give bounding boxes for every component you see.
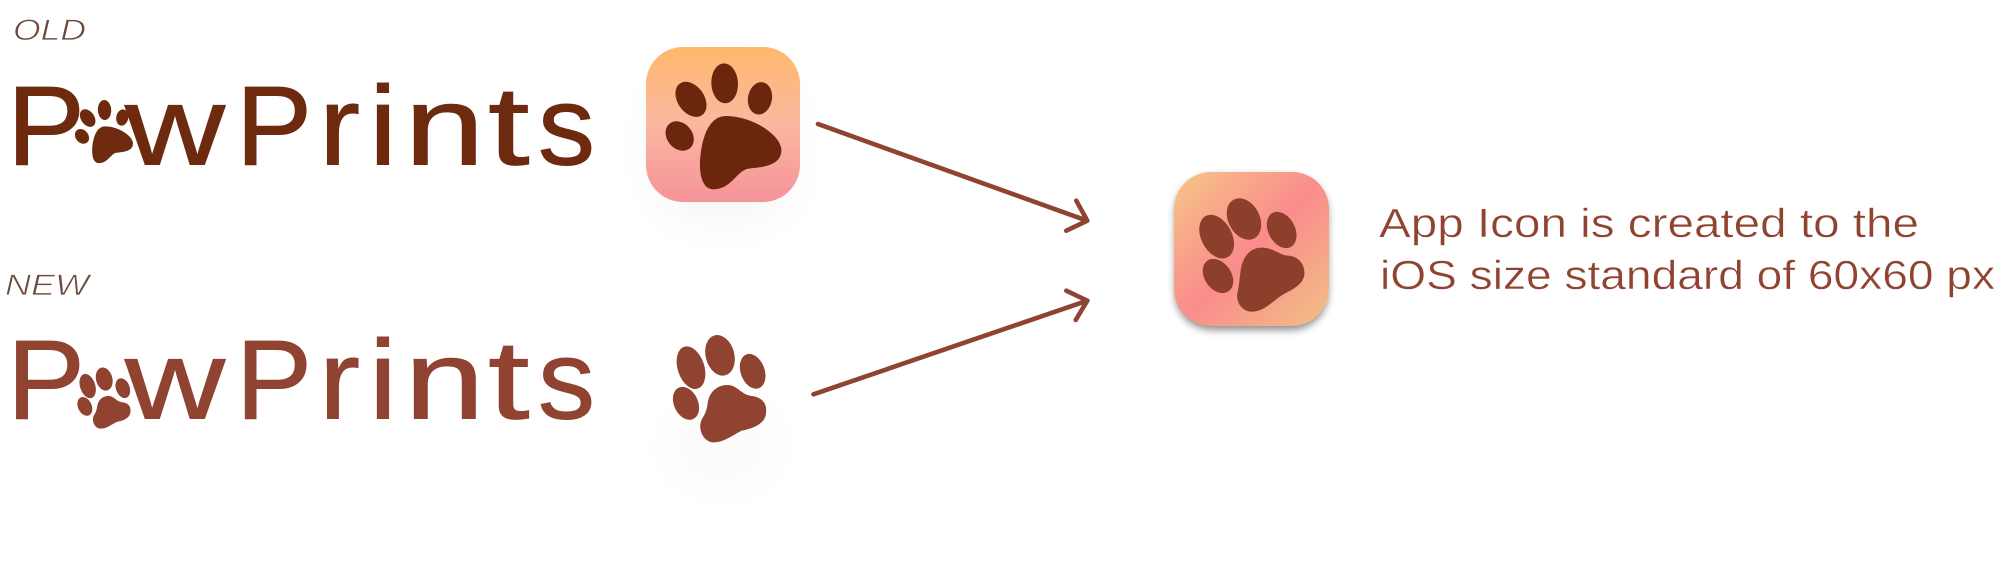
new PawPrints logo: w xyxy=(124,318,226,442)
old PawPrints logo xyxy=(7,64,595,188)
old PawPrints logo: t xyxy=(488,64,530,188)
arrow: old to app icon xyxy=(818,124,1087,231)
label: old: OLD xyxy=(13,14,86,47)
new PawPrints logo: n xyxy=(404,318,484,442)
new PawPrints logo xyxy=(7,318,595,442)
new PawPrints logo: s xyxy=(538,318,595,442)
new PawPrints logo: P xyxy=(236,318,312,442)
old PawPrints logo: w xyxy=(124,64,226,188)
icon: app paw xyxy=(1192,192,1304,312)
caption xyxy=(1379,200,1996,298)
old PawPrints logo: P xyxy=(7,64,85,188)
caption: App Icon is created to the xyxy=(1379,200,1919,246)
icon: old paw xyxy=(660,63,781,189)
old PawPrints logo: s xyxy=(538,64,595,188)
final app icon xyxy=(1174,172,1329,330)
old PawPrints logo: i xyxy=(369,64,397,188)
icon: new paw xyxy=(668,332,770,442)
old PawPrints logo: r xyxy=(319,64,360,188)
new PawPrints logo: P xyxy=(7,318,85,442)
new PawPrints logo: r xyxy=(319,318,360,442)
caption: iOS size standard of 60x60 px xyxy=(1380,252,1996,298)
label: new: NEW xyxy=(5,269,92,302)
old app icon xyxy=(646,47,800,215)
icon: old logo paw xyxy=(72,100,133,163)
old PawPrints logo: P xyxy=(236,64,312,188)
icon: new logo paw xyxy=(74,366,133,429)
new PawPrints logo: t xyxy=(488,318,530,442)
new standalone paw xyxy=(667,332,777,485)
new PawPrints logo: i xyxy=(369,318,397,442)
old PawPrints logo: n xyxy=(404,64,484,188)
arrow: new to app icon xyxy=(814,291,1087,394)
